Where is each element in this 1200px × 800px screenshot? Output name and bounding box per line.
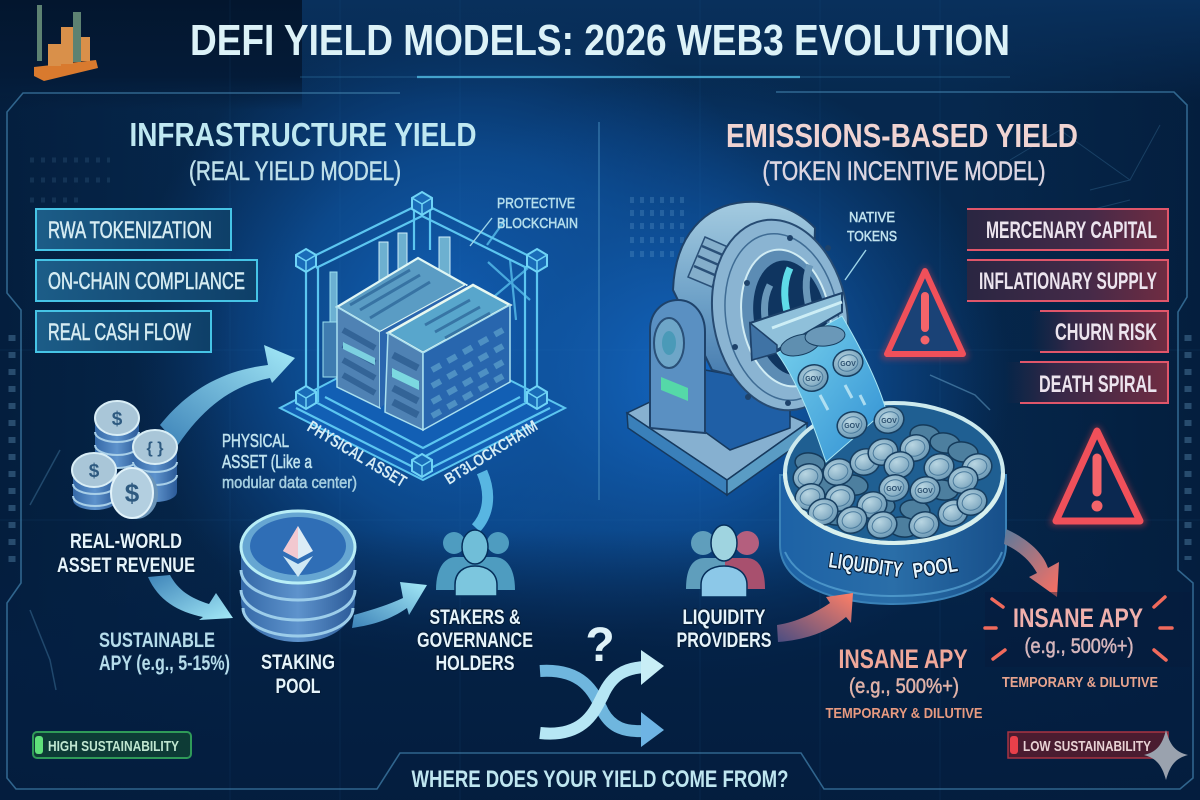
panel: emissions-based yield [627,117,1190,780]
text: apy example: (e.g., 500%+) [1024,635,1134,658]
callout: native tokens [845,209,897,280]
base platform [280,335,565,480]
label: staking pool: STAKING [261,651,335,674]
label: real-world asset revenue [57,530,195,577]
label: liquidity providers: PROVIDERS [676,629,772,652]
label: sustainable apy: SUSTAINABLE [99,629,215,652]
rotated label: blockchain typo: BT3LOCKCHAIM [442,418,541,488]
cube frame [306,203,537,402]
tag: RWA tokenization: RWA TOKENIZATION [48,217,212,244]
pedestal [650,300,705,433]
tag: death spiral [1005,362,1168,403]
chute of tokens [777,316,907,462]
drum front ring [697,209,863,421]
cube corner nodes [296,192,547,477]
label: liquidity: LIQUIDITY [827,549,904,582]
machine drum [673,202,815,395]
tag: real cash flow [36,311,211,352]
label: stakers and governance holders: GOVERNANCE [417,629,533,652]
callout: insane apy lower: (e.g., 500%+) [849,675,959,698]
icon: stacks of revenue coins [72,401,177,519]
rollers [764,265,810,330]
central divider [598,122,600,500]
tag: churn risk [1030,311,1168,352]
machine lower body [705,370,790,450]
label: sustainable apy [99,629,230,675]
callout: insane apy lower: TEMPORARY & DILUTIVE [826,705,982,722]
label: stakers and governance holders: STAKERS & [430,606,520,629]
coin stack back: $ [112,409,123,430]
rim front highlight [785,473,1003,543]
illustration: token emission machine [627,202,863,495]
tag: on-chain compliance: ON-CHAIN COMPLIANCE [48,268,245,295]
tag: mercenary capital [967,209,1168,250]
label: stakers and governance holders: HOLDERS [436,652,514,675]
text: temporary and dilutive upper: TEMPORARY & DILUTIVE [1002,674,1158,691]
label: staking pool: POOL [276,675,321,698]
question mark: ? [585,619,615,672]
tag: on-chain compliance [36,260,257,301]
chute of tokens: GOV [840,361,856,368]
side tube and unit [323,272,337,377]
coin front: $ [125,478,140,508]
arrow: blockchain to stakers [476,472,488,528]
arrow: pool to insane apy [1004,529,1059,597]
panel: insane apy highlighted [985,592,1190,667]
label: liquidity providers: LIQUIDITY [682,606,766,629]
label: real-world asset revenue: ASSET REVENUE [57,554,195,577]
machine base [627,378,807,495]
chute of tokens: GOV [805,376,821,383]
text: insane apy: INSANE APY [1013,603,1143,633]
rotated label: physical asset: PHYSICAL ASSET [304,417,410,491]
pool tokens [790,431,995,542]
icon: liquidity providers group [686,525,765,597]
pool tokens: GOV [886,486,902,493]
title: DEFI YIELD MODELS: 2026 WEB3 EVOLUTION [190,16,1010,65]
drum bolts [732,235,831,406]
callout: insane apy lower: INSANE APY [838,644,968,674]
label: stakers and governance holders [417,606,533,675]
burst ticks [985,597,1172,660]
drum vent [688,237,728,287]
panel: infrastructure yield [33,116,578,758]
arrow: revenue to physical asset [160,345,295,445]
server building back [337,258,466,408]
badge: high sustainability [33,732,191,758]
chute of tokens: GOV [881,418,897,425]
callout: insane apy lower [826,644,982,722]
callout: physical asset description: modular data center) [222,473,357,492]
callout: protective blockchain: BLOCKCHAIN [497,215,578,232]
callout: physical asset description: ASSET (Like a [222,452,313,472]
arrow: providers to pool [777,593,853,642]
arrow: staking pool to stakers [352,582,427,628]
tag: real cash flow: REAL CASH FLOW [48,319,191,346]
subheading: token incentive model: (TOKEN INCENTIVE MODEL) [762,156,1046,186]
logo: bar chart icon [34,5,98,81]
icon: stakers group [436,530,515,596]
label: liquidity providers [676,606,772,652]
tag: inflationary supply [967,260,1168,301]
icon: warning triangle lower [1054,430,1142,522]
icon: ethereum diamond [283,526,313,577]
footer question: WHERE DOES YOUR YIELD COME FROM? [412,766,788,793]
callout: protective blockchain [470,195,578,246]
callout: physical asset description: PHYSICAL [222,431,289,451]
arrow: revenue to staking pool [148,575,233,620]
pool tokens: GOV [917,488,933,495]
coin stack left: $ [89,461,100,482]
illustration: liquidity pool [777,316,1006,604]
heading: emissions-based yield: EMISSIONS-BASED YIELD [726,117,1078,154]
pool back tokens [794,423,979,539]
badge: low sustainability [1008,732,1168,758]
icon: warning triangle upper [885,270,965,356]
illustration: modular data center in blockchain cube [280,192,565,480]
icon: staking pool coin stack [241,511,355,642]
label: staking pool [261,651,335,698]
chute of tokens: GOV [844,423,860,430]
shuffle arrows: where yield comes from [540,650,664,747]
label: pool word: POOL [911,553,959,583]
smokestacks [379,233,450,299]
callout: physical asset description [222,431,357,492]
icon: sparkle watermark [1144,730,1188,780]
callout: native tokens: NATIVE [849,209,895,226]
label: real-world asset revenue: REAL-WORLD [70,530,182,553]
server building front [385,285,510,430]
label: sustainable apy: APY (e.g., 5-15%) [99,652,230,675]
badge: high sustainability: HIGH SUSTAINABILITY [48,738,179,755]
coin stack right: { } [147,440,163,457]
badge: low sustainability: LOW SUSTAINABILITY [1023,738,1151,755]
roller bar [750,293,842,360]
subheading: real yield model: (REAL YIELD MODEL) [189,156,401,186]
callout: native tokens: TOKENS [847,228,897,245]
tag: RWA tokenization [36,209,231,250]
callout: protective blockchain: PROTECTIVE [497,195,575,212]
heading: infrastructure yield: INFRASTRUCTURE YIELD [130,116,476,153]
